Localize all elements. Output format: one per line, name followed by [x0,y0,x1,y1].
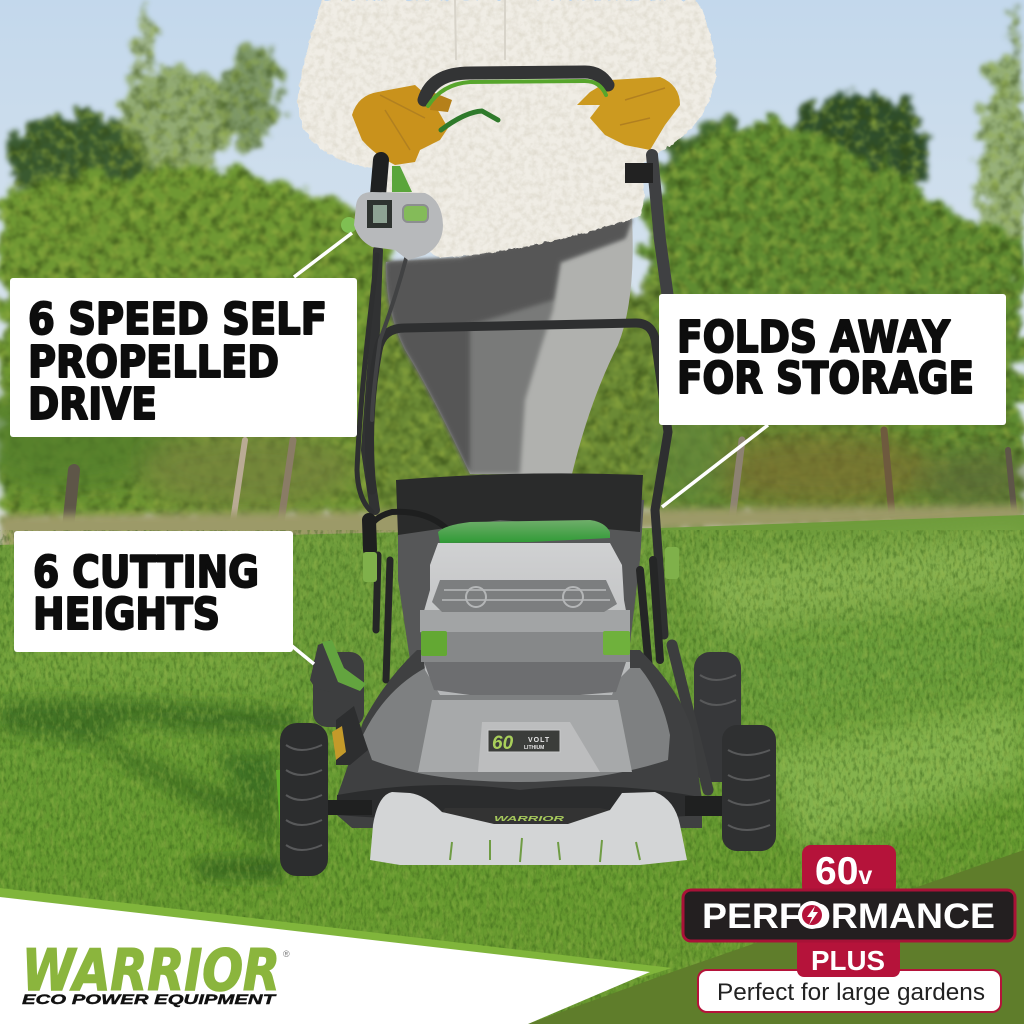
60V performance plus badge [683,845,1015,1012]
callout: folds away for storage [659,294,1006,425]
lower arms [376,555,390,680]
axle brackets [328,800,372,815]
height lever [310,640,366,692]
distant ground strip [0,505,1024,552]
leader line: storage [662,425,768,507]
coiled cable [367,512,446,548]
sky background [0,0,1024,540]
tree trunks [68,430,1014,528]
olive corner panel [528,850,1024,1024]
mower rear wheels [313,652,741,782]
right glove [577,77,680,150]
leader line: drive [294,233,352,277]
60 volt label: LITHIUM [524,745,544,751]
60v tab: 60v [815,850,872,893]
green diagonal stripe [0,888,672,978]
performance bar: PERFORMANCE [702,897,995,936]
callout: 6 speed self propelled drive: 6 SPEED SELF [28,294,327,345]
left handle tube [378,160,381,195]
pedestal [418,700,632,772]
callout: 6 speed self propelled drive [10,278,357,437]
right handle tube [652,155,668,298]
control cables [357,255,377,512]
green side tabs [421,631,447,656]
callout: 6 speed self propelled drive: PROPELLED [28,337,279,388]
battery pack [418,520,632,772]
Warrior logo: ECO POWER EQUIPMENT [22,991,277,1007]
lower U frame [370,323,668,635]
tagline pill [698,970,1001,1012]
60v tab [802,845,896,895]
grass catcher bag [396,473,644,660]
callout: 6 cutting heights [14,531,293,652]
callout: 6 cutting heights: HEIGHTS [33,589,220,640]
speed control box [341,192,443,260]
tagline pill: Perfect for large gardens [717,979,985,1006]
lower hedge shading [0,370,1024,510]
white logo panel [0,897,650,1024]
Warrior logo: WARRIOR [22,938,280,1004]
green handle clips [363,163,679,582]
mower handle frame [357,72,708,790]
lawn [0,515,1024,1024]
leader line: cutting heights [292,646,314,664]
mower deck [310,640,725,828]
front deck skirt: WARRIOR [494,816,564,823]
callout: folds away for storage: FOR STORAGE [677,353,974,404]
Warrior logo: ® [283,949,290,959]
side bracket and reflector [336,706,368,765]
plus tab [797,935,900,977]
60 volt label: 60 [492,733,514,754]
callout: folds away for storage: FOLDS AWAY [677,312,951,363]
left glove [352,85,452,165]
body [420,543,630,695]
upper handlebar [424,72,608,100]
jeans [386,218,633,474]
callout: 6 cutting heights: 6 CUTTING [33,547,259,598]
hoodie strings [455,0,505,60]
front wheels [276,675,776,876]
front deck skirt [370,792,687,865]
background trees and hedges [0,0,1024,520]
white fleece sweater [298,0,716,258]
performance bar [683,890,1015,941]
bolt icon [798,901,826,929]
vent band [432,580,617,612]
plus tab: PLUS [811,945,885,976]
callout: 6 speed self propelled drive: DRIVE [28,379,157,430]
green safety bail [441,111,498,130]
60 volt label [488,730,560,754]
green lid [438,520,610,543]
person [298,0,716,474]
60 volt label: VOLT [528,737,550,744]
